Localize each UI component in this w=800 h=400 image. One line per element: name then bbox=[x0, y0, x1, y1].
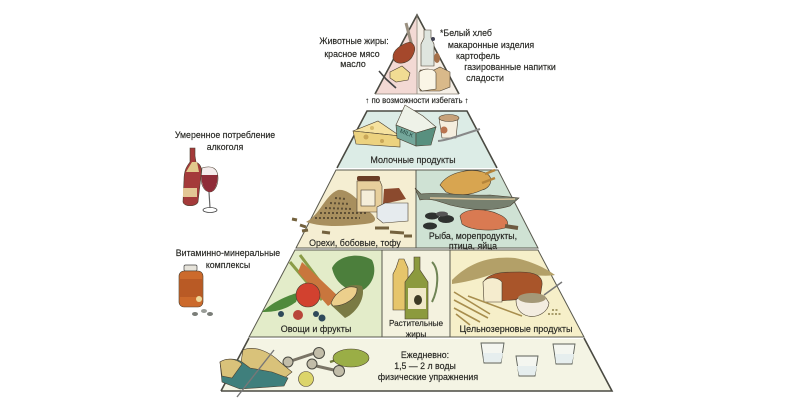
icon: vegetables and fruit bbox=[262, 255, 374, 322]
label: white bread: *Белый хлеб bbox=[440, 28, 492, 38]
label: water amount: 1,5 — 2 л воды bbox=[394, 361, 456, 371]
label: vegetable: Растительные bbox=[389, 319, 443, 328]
icon: milk carton bbox=[396, 105, 436, 146]
label: complexes: комплексы bbox=[206, 260, 250, 270]
label: nuts, beans, tofu: Орехи, бобовые, тофу bbox=[309, 238, 401, 248]
icon: fish bbox=[415, 188, 519, 210]
icon: nuts pile bbox=[292, 190, 412, 236]
icon: butter bbox=[379, 66, 410, 88]
icon: cheese bbox=[353, 121, 400, 147]
icon: wheat and bread bbox=[452, 258, 562, 325]
label: animal fats: Животные жиры: bbox=[319, 36, 389, 46]
label: potato: картофель bbox=[456, 51, 500, 61]
icon: red meat bbox=[393, 23, 415, 63]
label: physical exercise: физические упражнения bbox=[378, 372, 478, 382]
icon: jar bbox=[357, 176, 406, 212]
label: moderate: Умеренное потребление bbox=[175, 130, 275, 140]
label: soft drinks: газированные напитки bbox=[464, 62, 556, 72]
label: vegetables and fruit: Овощи и фрукты bbox=[281, 324, 351, 334]
label: dairy: Молочные продукты bbox=[370, 155, 456, 165]
icon: mussels bbox=[423, 212, 454, 230]
pyramid tier: avoid bbox=[375, 15, 459, 94]
side note: alcohol bbox=[175, 130, 275, 212]
icon: chicken bbox=[440, 170, 495, 195]
icon: oil bottles bbox=[393, 257, 437, 319]
icon: sneakers bbox=[220, 348, 292, 397]
icon: water glasses bbox=[481, 343, 575, 376]
pyramid tier: nuts and protein bbox=[292, 170, 538, 251]
icon: soda bottle bbox=[421, 30, 440, 66]
label: vitamin-mineral: Витаминно-минеральные bbox=[176, 248, 280, 258]
label: daily: Ежедневно: bbox=[401, 350, 449, 360]
carton label: MILK bbox=[399, 129, 414, 139]
icon: tofu bbox=[377, 203, 408, 223]
label: fish, seafood: Рыба, морепродукты, bbox=[429, 231, 517, 241]
label: red meat: красное мясо bbox=[324, 49, 380, 59]
icon: vitamin bottle and pills bbox=[179, 265, 213, 316]
label: fats: жиры bbox=[406, 330, 426, 339]
label: alcohol: алкоголя bbox=[207, 142, 243, 152]
label: whole grain: Цельнозерновые продукты bbox=[459, 324, 573, 334]
label: poultry, eggs: птица, яйца bbox=[449, 241, 497, 251]
label: sweets: сладости bbox=[466, 73, 504, 83]
icon: yogurt cup bbox=[438, 114, 480, 141]
label: butter: масло bbox=[340, 59, 366, 69]
pyramid tier: dairy bbox=[337, 105, 497, 168]
icon: salmon steak bbox=[460, 210, 518, 230]
pyramid tier: daily base bbox=[220, 338, 612, 397]
icon: wine bottle and glass bbox=[183, 148, 218, 212]
icon: dumbbells bbox=[283, 348, 344, 376]
label: avoid if possible: ↑ по возможности избегать ↑ bbox=[365, 96, 469, 105]
side note: vitamins bbox=[176, 248, 280, 316]
icon: racket and ball bbox=[298, 349, 369, 386]
label: pasta: макаронные изделия bbox=[448, 40, 534, 50]
icon: white bread bbox=[419, 67, 450, 91]
pyramid tier: plant foods bbox=[249, 250, 584, 339]
